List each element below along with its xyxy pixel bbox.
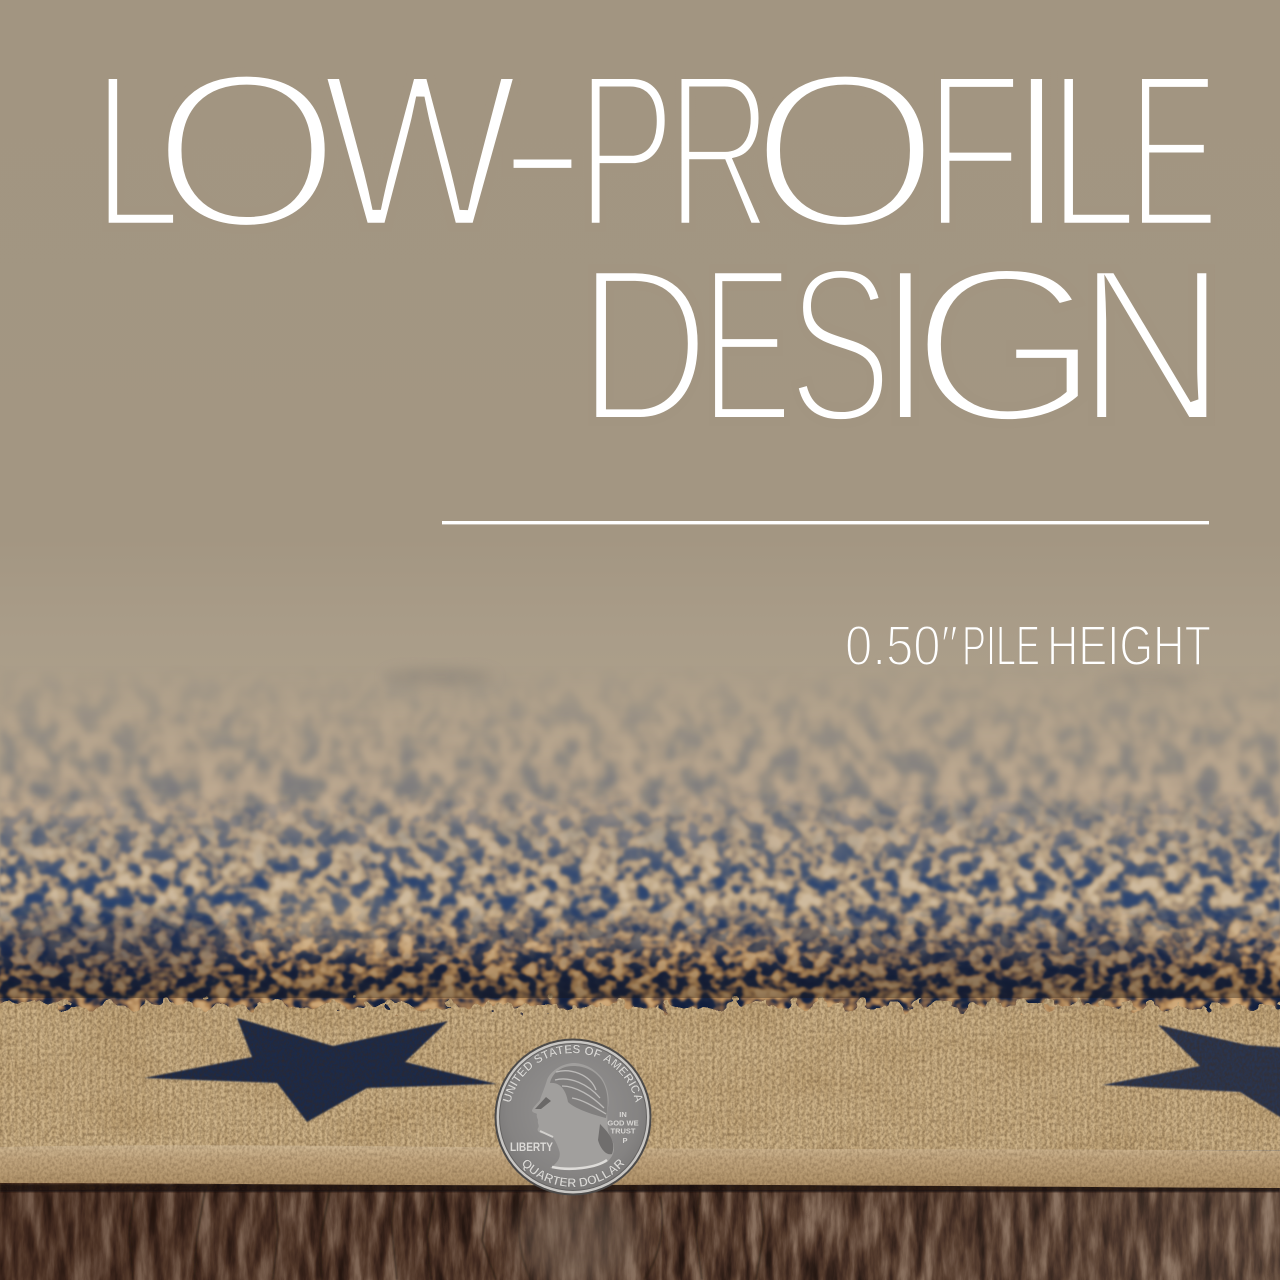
title line 1: O xyxy=(152,27,341,275)
pile height caption: PILE xyxy=(962,614,1040,678)
coin legend: top: UNITED STATES OF AMERICA xyxy=(502,1044,642,1103)
title line 1: R xyxy=(666,27,772,275)
title line 1: W xyxy=(321,27,519,275)
title line 2: D xyxy=(578,222,710,470)
pile height caption: 0.50″ xyxy=(845,614,958,678)
washington portrait xyxy=(532,1063,614,1169)
coin face xyxy=(500,1044,646,1190)
coin rim xyxy=(494,1038,652,1196)
coin reflection xyxy=(516,1190,640,1280)
shag pile: sharp near layer xyxy=(0,908,1280,1016)
pile shadow tone xyxy=(0,889,1280,998)
coin motto: P xyxy=(622,1136,628,1145)
title line 1: L xyxy=(1048,27,1138,275)
title line 2: S xyxy=(788,222,892,470)
far blurred star ghost xyxy=(385,668,1200,687)
title line 1: P xyxy=(577,27,676,275)
title line 1: E xyxy=(1128,27,1219,275)
title line 2: G xyxy=(910,222,1101,470)
title line 1: L xyxy=(92,27,182,275)
title line 1: F xyxy=(924,27,1023,275)
shag pile: soft far layer xyxy=(0,687,1280,867)
title line 1: - xyxy=(495,23,590,271)
shag pile: middle layer xyxy=(0,796,1280,966)
coin liberty: LIBERTY xyxy=(510,1142,553,1154)
title line 1: I xyxy=(1007,27,1066,275)
coin motto: GOD WE xyxy=(607,1118,639,1128)
wood cracks xyxy=(129,1190,764,1280)
hem weave xyxy=(0,1152,1280,1186)
woven base xyxy=(0,990,1280,1150)
divider rule xyxy=(442,521,1209,524)
wood floor xyxy=(0,1180,1280,1280)
title: LOW-PROFILE DESIGN xyxy=(92,23,1228,469)
title line 2: E xyxy=(701,222,793,470)
title line 1: O xyxy=(750,27,940,275)
pile height caption: HEIGHT xyxy=(1047,614,1211,678)
quarter dollar coin xyxy=(494,1038,652,1196)
coin legend: bottom: QUARTER DOLLAR xyxy=(522,1159,625,1188)
star right xyxy=(1102,1025,1280,1120)
coin motto: IN xyxy=(619,1110,627,1119)
floor shadow under rug xyxy=(0,1184,1280,1192)
rug: flat woven base with stars xyxy=(0,990,1280,1188)
folded hem xyxy=(0,1145,1280,1188)
coin motto: TRUST xyxy=(610,1126,636,1136)
star left xyxy=(144,1018,497,1122)
title line 2: N xyxy=(1076,222,1228,470)
coin motto xyxy=(607,1110,639,1145)
title line 2: I xyxy=(877,222,933,470)
